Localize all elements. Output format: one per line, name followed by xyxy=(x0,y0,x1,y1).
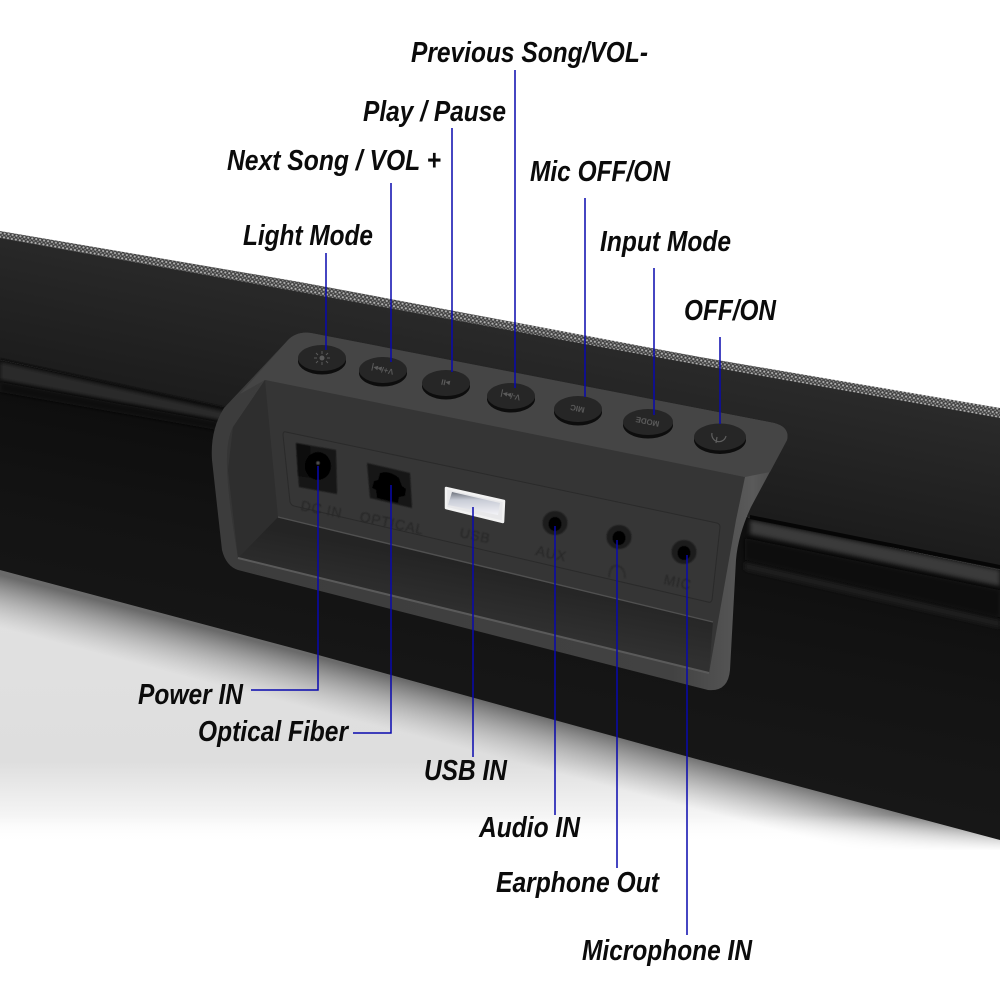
port: AUX jack xyxy=(534,511,568,564)
label: USB in: USB IN xyxy=(424,755,508,787)
label: audio in: Audio IN xyxy=(478,812,581,844)
button: power xyxy=(694,424,746,454)
port: USB: USB xyxy=(458,524,492,546)
button: previous song: V-/▸▸| xyxy=(500,389,521,402)
label: power in: Power IN xyxy=(138,679,244,711)
line: earphone out xyxy=(616,540,618,868)
port: MIC jack: MIC xyxy=(662,571,693,593)
label: earphone out: Earphone Out xyxy=(496,867,660,899)
button: next song xyxy=(359,357,407,386)
button: mic: MIC xyxy=(569,402,586,414)
button: next song: V+/▸▸| xyxy=(371,363,394,376)
port: MIC jack xyxy=(662,540,696,593)
line: optical fiber xyxy=(353,485,391,733)
recess floor xyxy=(238,517,713,673)
button: previous song xyxy=(487,383,535,412)
button: mode xyxy=(623,409,673,438)
line: next song xyxy=(390,183,392,362)
floor shadow beneath soundbar xyxy=(0,560,1000,851)
line: previous song xyxy=(514,70,516,388)
lower body section xyxy=(0,360,1000,840)
line: audio in xyxy=(554,526,556,815)
label: input mode: Input Mode xyxy=(600,226,731,258)
callout lines xyxy=(251,70,720,935)
line: light mode xyxy=(325,253,327,350)
port: USB xyxy=(446,488,504,546)
label: previous song: Previous Song/VOL- xyxy=(411,37,648,69)
port: optical xyxy=(358,463,426,538)
button: mic xyxy=(554,396,602,426)
port: DC IN xyxy=(296,443,344,521)
line: input mode xyxy=(653,268,655,415)
upper body section xyxy=(0,236,1000,570)
label: next song: Next Song / VOL + xyxy=(227,145,441,177)
port: AUX jack: AUX xyxy=(534,542,568,564)
line: power in xyxy=(251,466,318,690)
button: mode: MODE xyxy=(634,414,660,428)
port: DC IN: DC IN xyxy=(299,497,344,521)
bracket outer shell xyxy=(212,333,787,690)
port: optical: OPTICAL xyxy=(358,508,426,538)
label: optical fiber: Optical Fiber xyxy=(198,716,349,748)
label: mic off on: Mic OFF/ON xyxy=(530,156,671,188)
soundbar body xyxy=(0,231,1000,840)
body crease highlights xyxy=(0,358,1000,628)
top control face xyxy=(240,333,787,477)
label: light mode: Light Mode xyxy=(243,220,373,252)
label: play pause: Play / Pause xyxy=(363,96,506,128)
button: light mode xyxy=(298,345,346,374)
line: microphone in xyxy=(686,555,688,935)
line: play pause xyxy=(451,128,453,372)
line: mic off on xyxy=(584,198,586,397)
recess back wall xyxy=(227,380,745,673)
panel: control and port bracket xyxy=(212,333,787,690)
button: play pause xyxy=(422,370,470,400)
fabric mesh strip xyxy=(0,231,1000,418)
line: USB in xyxy=(472,507,474,757)
line: off on xyxy=(719,337,721,424)
port: headphone jack xyxy=(606,525,632,578)
recess left wall xyxy=(228,380,278,558)
label: off on: OFF/ON xyxy=(684,295,777,327)
label: microphone in: Microphone IN xyxy=(582,935,753,967)
label plate xyxy=(283,432,720,602)
button: play pause: ▸II xyxy=(440,377,452,388)
